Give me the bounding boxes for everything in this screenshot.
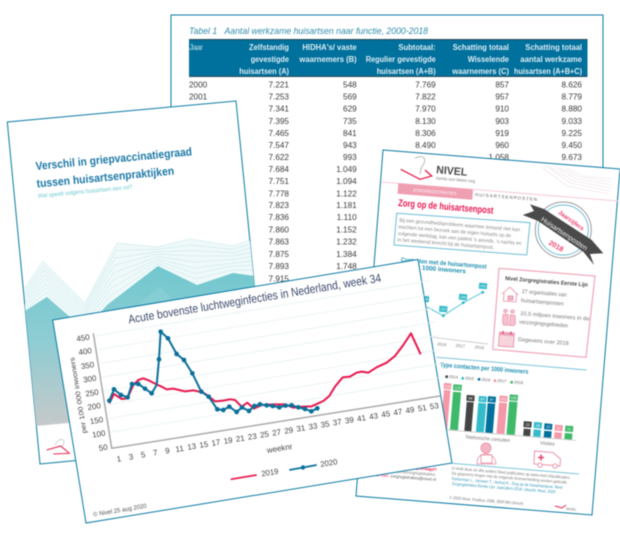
- x axis labels: 17: [211, 438, 222, 448]
- line chart: contacts per year: 255: [480, 284, 486, 289]
- bar chart: contact types: 125: [454, 386, 461, 390]
- y axis labels: 350: [80, 360, 95, 371]
- info box: Nivel Zorgregistraties Eerste Lijn: verzorgingsgebieden: [519, 320, 568, 329]
- bar chart: contact types: [439, 383, 580, 440]
- table rows: 9.450: [562, 141, 582, 150]
- bar chart: contact types: 109: [510, 396, 517, 400]
- x axis labels: 33: [308, 421, 319, 432]
- chart legend: [231, 457, 339, 479]
- table rows: 7.465: [268, 129, 289, 138]
- table rows: 8.880: [562, 104, 582, 114]
- table rows: 1.122: [336, 190, 357, 198]
- footer text: U vindt deze en alle andere Nivel publicaties op www.nivel.nl/publicaties.: [452, 466, 571, 480]
- intro text box: in het weekend terecht bij de huisartsenpost.: [397, 237, 494, 251]
- footer text: De gegevens mogen met de volgende bronvermelding worden gebruikt:: [452, 471, 568, 485]
- badge: Jaarcijfers 2018: [523, 202, 603, 265]
- table rows: [189, 80, 582, 284]
- icon: ambulance: [534, 451, 560, 468]
- bar chart legend: 2015: [465, 376, 475, 381]
- table rows: 7.341: [268, 104, 289, 114]
- table rows: 1.049: [336, 165, 357, 174]
- decorative corner lines: [543, 166, 613, 194]
- table header: Schatting totaal: [453, 43, 509, 52]
- table header: Schatting totaal: [525, 43, 582, 52]
- table header: HIDHA's/ vaste: [302, 43, 357, 52]
- badge: Jaarcijfers 2018: Huisartsenposten: [539, 216, 589, 252]
- table rows: 1.152: [336, 226, 357, 234]
- table rows: 841: [343, 129, 357, 138]
- line chart heading line two: per 1000 inwoners: [410, 264, 467, 275]
- y axis labels: 250: [85, 388, 100, 399]
- table rows: 903: [495, 117, 509, 126]
- table rows: 7.860: [268, 226, 289, 234]
- cover subtitle: Wat speelt volgens huisartsen een rol?: [38, 185, 133, 200]
- intro text box: [394, 213, 530, 255]
- contact text: [340, 459, 437, 482]
- info box: Nivel Zorgregistraties Eerste Lijn: Gegevens over 2018: [518, 337, 569, 347]
- y axis labels: 450: [76, 333, 91, 344]
- table rows: 7.822: [415, 92, 436, 102]
- table header: Jaar: [189, 43, 203, 52]
- chart legend: 2019: [261, 467, 279, 478]
- table rows: 1.110: [337, 213, 357, 222]
- icon: small footer logo: [555, 505, 577, 512]
- pink tab: [397, 183, 473, 200]
- pink header line: [381, 182, 618, 201]
- intro text box: Bij een gezondheidsprobleem waarmee iemand niet kan: [399, 218, 520, 233]
- bar chart legend: 2016: [481, 377, 491, 383]
- bar chart: contact types: 97: [480, 397, 485, 402]
- footer text: Zorgregistraties Eerste Lijn: Jaarcijfers 2018. Utrecht: Nivel, 2020: [452, 481, 556, 494]
- line chart: contacts per year: [421, 283, 488, 350]
- y axis title: per 100 000 inwoners: [69, 356, 89, 434]
- footer text: Ramerman L., Janssen T., Verheij R., Zorg op de huisartsenpost. Nivel: [452, 476, 563, 490]
- table rows: 8.130: [415, 117, 436, 126]
- table rows: 629: [343, 104, 357, 114]
- x axis labels: 25: [259, 429, 270, 440]
- bar chart heading: Type contacten per 1000 inwoners: [440, 362, 529, 376]
- bar chart: contact types: 124: [444, 384, 451, 389]
- info box: Nivel Zorgregistraties Eerste Lijn: 27 organisaties van: [522, 289, 567, 299]
- table header: Wisselende: [468, 55, 510, 64]
- contact text: of mail met: zorgregistraties@nivel.nl: [367, 472, 436, 482]
- footer text: © 2020 Nivel, Postbus 1568, 3500 BN Utrecht: [449, 495, 524, 506]
- table rows: 993: [343, 153, 357, 162]
- y axis labels: 100: [91, 429, 107, 440]
- table rows: 1.748: [336, 262, 357, 271]
- x axis labels: 39: [344, 415, 355, 426]
- chart legend: 2020: [320, 457, 339, 469]
- bar chart legend: [445, 374, 524, 385]
- cover title line two: tussen huisartsenpraktijken: [36, 166, 175, 190]
- table rows: 7.253: [268, 92, 289, 102]
- icon: Nivel logo: [401, 157, 432, 179]
- icon: people: [502, 309, 516, 326]
- icon: house: [502, 287, 518, 302]
- grid lines: [95, 281, 445, 432]
- table rows: 1.181: [336, 201, 357, 210]
- intro text box: volgende werkdag, kan een patiënt 's avonds, 's nachts en: [398, 231, 522, 247]
- x axis labels: 45: [381, 409, 391, 420]
- bar chart: contact types: 26: [536, 424, 540, 428]
- bar chart legend: 2014: [449, 374, 459, 380]
- x axis labels: 43: [368, 411, 379, 422]
- table rows: 1.384: [336, 250, 357, 259]
- logo tagline: Kennis voor betere zorg: [436, 176, 476, 184]
- x axis labels: 13: [187, 442, 197, 452]
- table header: huisartsen (A+B): [377, 67, 436, 76]
- bar chart: contact types: 94: [468, 396, 473, 401]
- x axis labels: 37: [332, 417, 343, 428]
- table header: huisartsen (A+B+C): [514, 67, 582, 76]
- x axis labels: 31: [296, 423, 307, 434]
- table rows: 7.915: [268, 274, 289, 284]
- table header: huisartsen (A): [239, 67, 289, 76]
- table rows: 7.395: [268, 117, 289, 126]
- table rows: 919: [495, 129, 509, 138]
- info box: Nivel Zorgregistraties Eerste Lijn: 10,5 miljoen inwoners in de: [520, 311, 590, 323]
- table rows: 7.875: [268, 250, 289, 259]
- x axis labels: 49: [405, 405, 416, 416]
- line chart: contacts per year: 2018: [474, 345, 485, 350]
- x axis labels: 15: [199, 440, 209, 450]
- table rows: 7.622: [268, 153, 289, 162]
- y axis labels: 50: [98, 443, 109, 453]
- table rows: 857: [495, 80, 509, 90]
- table rows: 569: [343, 92, 357, 102]
- x axis labels: 51: [417, 403, 428, 413]
- intro text box: wachten tot een bezoek aan de eigen huisarts op de: [398, 224, 511, 239]
- x axis labels: 9: [164, 446, 171, 456]
- icon: calendar: [498, 331, 515, 347]
- contact text: Wilt u meer informatie of gegevens opgevraagd?: [340, 459, 437, 472]
- panel: influenza chart page: [53, 260, 452, 523]
- table title: Tabel 1 Aantal werkzame huisartsen naar functie, 2000-2018: [189, 26, 429, 37]
- bar chart legend: 2018: [514, 380, 524, 385]
- y axis labels: 200: [87, 401, 102, 412]
- table rows: 8.306: [415, 129, 436, 138]
- x axis labels: 3: [128, 452, 134, 462]
- badge: Jaarcijfers 2018: Jaarcijfers: [557, 210, 585, 233]
- icon: small footer logo: NIVEL: [566, 507, 577, 512]
- table header: Subtotaal:: [398, 43, 436, 52]
- table header: Regulier gevestigde: [366, 55, 436, 64]
- table rows: 7.769: [415, 80, 436, 90]
- x axis labels: 11: [175, 444, 185, 454]
- logo wordmark: NIVEL: [436, 164, 468, 179]
- table rows: 8.626: [562, 80, 582, 90]
- x axis labels: 35: [320, 419, 331, 430]
- section label: HUISARTSENPOSTEN: [475, 192, 537, 202]
- table rows: 7.547: [268, 141, 289, 150]
- divider: [437, 357, 587, 370]
- x axis labels: 1: [116, 454, 122, 464]
- x axis labels: 5: [140, 450, 147, 460]
- y axis labels: [76, 333, 109, 453]
- x axis labels: 27: [271, 427, 282, 438]
- table rows: 8.490: [415, 141, 436, 150]
- line chart: contacts per year: 2016: [437, 342, 447, 347]
- table rows: 7.778: [268, 190, 289, 198]
- panel: table page: [171, 15, 603, 293]
- info box: Nivel Zorgregistraties Eerste Lijn: [493, 268, 595, 357]
- table rows: 7.893: [268, 262, 289, 271]
- icon: call centre agent: [477, 443, 496, 464]
- chart axes: [93, 333, 440, 448]
- table header: waarnemers (B): [298, 55, 357, 64]
- bar chart: contact types: 21: [567, 427, 571, 431]
- info box: Nivel Zorgregistraties Eerste Lijn: Nivel Zorgregistraties Eerste Lijn: [505, 276, 589, 289]
- table header: Zelfstandig: [249, 43, 289, 52]
- footer text: [449, 466, 571, 506]
- poster title: Zorg op de huisartsenpost: [398, 198, 494, 217]
- table rows: 9.033: [562, 117, 582, 126]
- table rows: 7.970: [415, 104, 436, 114]
- x axis labels: 41: [356, 413, 367, 424]
- icon: cover logo: [47, 439, 69, 454]
- line chart: contacts per year: 2017: [455, 343, 466, 349]
- x axis labels: 23: [247, 431, 258, 442]
- bar chart: contact types: 97: [490, 398, 494, 402]
- y axis labels: 150: [89, 415, 104, 426]
- line chart: contacts per year: 248: [422, 297, 428, 302]
- table header: gevestigde: [251, 55, 290, 64]
- table rows: 735: [343, 117, 357, 126]
- chart title: Acute bovenste luchtweginfecties in Nederland, week 34: [127, 271, 382, 326]
- category label: visits: Visites: [540, 441, 555, 448]
- line: 2020 series: [107, 329, 320, 414]
- line chart heading: Contacten met de huisartsenpost: [401, 257, 488, 271]
- line chart: contacts per year: 249: [460, 295, 466, 300]
- cover title: Verschil in griepvaccinatiegraad: [35, 146, 193, 173]
- table rows: 1.058: [488, 153, 509, 162]
- line chart: contacts per year: 242: [440, 307, 446, 312]
- contact text: Kijk op www.nivel.nl/zorgregistraties.: [368, 467, 436, 477]
- x axis labels: 7: [152, 448, 159, 458]
- line: 2019 series: [109, 333, 421, 409]
- cover mountain artwork: [20, 236, 262, 428]
- chart copyright: © Nivel 25 aug 2020: [93, 503, 148, 518]
- x axis labels: 29: [284, 425, 294, 436]
- table rows: 1.094: [336, 177, 357, 186]
- x axis labels: 47: [393, 407, 404, 418]
- table rows: 7.836: [268, 213, 289, 222]
- bar chart: contact types: 23: [525, 423, 530, 427]
- x axis labels: [116, 401, 440, 464]
- table rows: 7.751: [268, 177, 289, 186]
- table rows: 7.823: [268, 201, 289, 210]
- panel: poster page: [340, 150, 620, 515]
- table rows: 943: [343, 141, 357, 150]
- table rows: 910: [495, 104, 509, 114]
- category label: telephone: Telefonische consulten: [465, 435, 510, 444]
- table rows: 548: [343, 80, 357, 90]
- bar chart: contact types: 22: [546, 425, 550, 429]
- x axis labels: 53: [429, 401, 440, 411]
- table rows: 8.779: [562, 92, 582, 102]
- table rows: 7.863: [268, 238, 289, 246]
- table rows: 1.232: [336, 238, 357, 246]
- table rows: 2001: [189, 92, 208, 102]
- table rows: 7.221: [268, 80, 289, 90]
- x axis labels: 21: [235, 433, 246, 444]
- badge: Jaarcijfers 2018: 2018: [547, 240, 564, 254]
- bar chart: contact types: 102: [500, 397, 507, 401]
- y axis labels: 300: [82, 374, 98, 385]
- table rows: 7.684: [268, 165, 289, 174]
- table rows: 960: [495, 141, 509, 150]
- x axis labels: 19: [223, 435, 234, 446]
- table rows: 2000: [189, 80, 208, 90]
- bar chart: contact types: 22: [556, 426, 561, 431]
- table rows: 9.225: [562, 129, 582, 138]
- bar chart legend: 2017: [497, 378, 507, 384]
- y axis labels: 400: [78, 346, 93, 357]
- pink tab: ZORGREGISTRATIES: [413, 188, 457, 196]
- info box: Nivel Zorgregistraties Eerste Lijn: huisartsenposten: [521, 298, 564, 307]
- table header: waarnemers (C): [451, 67, 509, 76]
- table rows: 9.673: [562, 153, 582, 162]
- table header: aantal werkzame: [520, 55, 583, 64]
- table rows: 957: [495, 92, 509, 102]
- x axis title: weeknr: [265, 442, 293, 455]
- divider footer: [452, 463, 579, 474]
- table header: [189, 39, 588, 77]
- panel: report cover: [7, 101, 270, 464]
